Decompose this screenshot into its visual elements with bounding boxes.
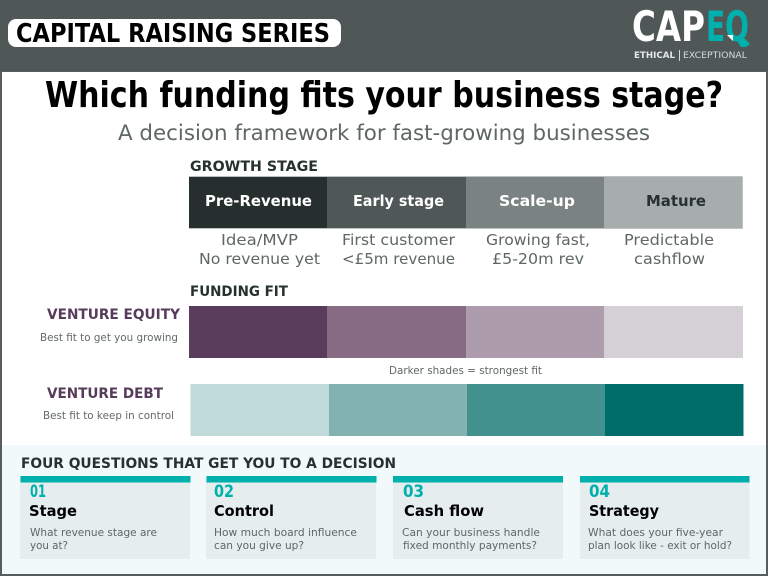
description: scale-up — [486, 231, 590, 268]
series badge: CAPITAL RAISING SERIES — [16, 19, 330, 49]
card: control: can you give up? — [214, 540, 304, 552]
description: scale-up: Growing fast, — [486, 231, 590, 249]
card: control: Control — [214, 502, 274, 520]
funding fit heading: FUNDING FIT — [190, 284, 288, 300]
stage: pre-revenue — [189, 177, 327, 228]
CapEQ logo: CAP — [632, 2, 705, 51]
panel heading: FOUR QUESTIONS THAT GET YOU TO A DECISION — [21, 456, 396, 472]
venture equity label: Best fit to get you growing — [40, 332, 178, 344]
description: pre-revenue — [199, 231, 320, 268]
description: mature: cashflow — [634, 250, 705, 268]
card: strategy: Strategy — [589, 502, 659, 520]
card: strategy: 04 — [589, 482, 610, 502]
description: early stage: <£5m revenue — [342, 250, 455, 268]
stage descriptions — [199, 231, 714, 268]
stage: mature — [604, 177, 742, 228]
shading legend note: Darker shades = strongest fit — [389, 365, 542, 377]
description: mature — [624, 231, 714, 268]
venture debt bar — [190, 384, 744, 436]
stage: early stage — [327, 177, 466, 228]
description: pre-revenue: Idea/MVP — [221, 231, 298, 249]
card: stage: What revenue stage are — [30, 527, 157, 539]
CapEQ logo: ETHICAL — [634, 51, 675, 61]
card: strategy: plan look like - exit or hold? — [588, 540, 732, 552]
description: early stage — [342, 231, 456, 268]
description: scale-up: £5-20m rev — [492, 250, 584, 268]
CapEQ logo — [632, 2, 750, 61]
subtitle: A decision framework for fast-growing businesses — [118, 121, 650, 145]
stage: mature: Mature — [646, 192, 706, 210]
description: pre-revenue: No revenue yet — [199, 250, 320, 268]
growth stage bar — [189, 176, 742, 228]
card: control — [206, 476, 376, 559]
description: mature: Predictable — [624, 231, 714, 249]
card: cash flow: Cash flow — [404, 502, 484, 520]
stage: scale-up — [466, 177, 604, 228]
card: stage: you at? — [30, 540, 68, 552]
venture debt label: VENTURE DEBT — [47, 386, 163, 402]
card: strategy — [580, 476, 750, 559]
card: cash flow — [393, 476, 563, 559]
card: control: 02 — [214, 482, 234, 502]
card: stage: 01 — [30, 482, 46, 502]
venture debt label: Best fit to keep in control — [43, 410, 174, 422]
header band — [0, 0, 768, 71]
venture debt label — [43, 386, 174, 422]
venture equity bar — [189, 306, 743, 358]
card: control: How much board influence — [214, 527, 357, 539]
panel: four questions — [2, 445, 766, 574]
description: early stage: First customer — [342, 231, 456, 249]
venture equity label — [40, 307, 180, 344]
stage: early stage: Early stage — [353, 192, 444, 210]
CapEQ logo: EXCEPTIONAL — [683, 51, 747, 61]
stage: scale-up: Scale-up — [499, 192, 575, 210]
venture equity label: VENTURE EQUITY — [47, 307, 180, 323]
card: stage — [20, 476, 190, 559]
card: cash flow: Can your business handle — [402, 527, 540, 539]
growth stage heading: GROWTH STAGE — [190, 159, 318, 175]
card: stage: Stage — [29, 502, 77, 520]
card: cash flow: 03 — [403, 482, 424, 502]
stage: pre-revenue: Pre-Revenue — [205, 192, 312, 210]
card: cash flow: fixed monthly payments? — [403, 540, 537, 552]
card: strategy: What does your five-year — [588, 527, 724, 539]
